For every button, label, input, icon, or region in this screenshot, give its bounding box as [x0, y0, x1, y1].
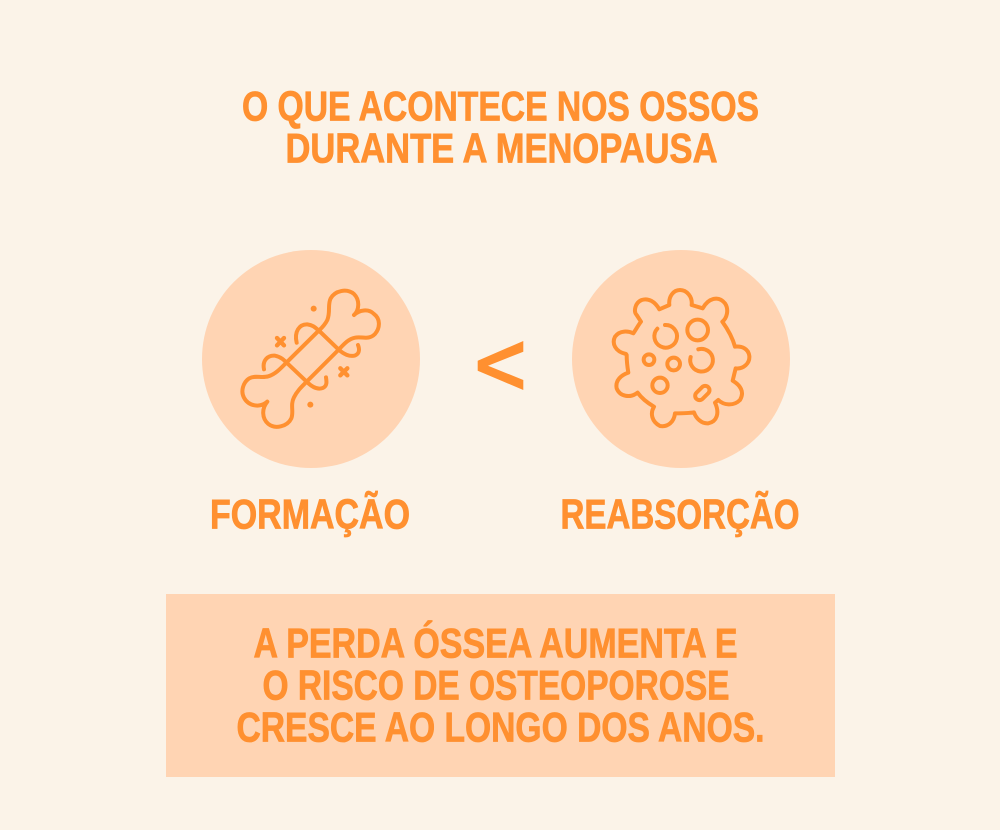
callout text: A PERDA ÓSSEA AUMENTA E [254, 618, 738, 666]
label: formação: FORMAÇÃO [210, 491, 410, 538]
callout [166, 594, 835, 777]
label: reabsorção: REABSORÇÃO [560, 491, 800, 538]
title: DURANTE A MENOPAUSA [286, 124, 718, 172]
panel: bone resorption circle [572, 250, 790, 468]
title [242, 82, 759, 172]
icon: bone [242, 291, 379, 427]
icon: porous bone cell [614, 290, 749, 426]
title: O QUE ACONTECE NOS OSSOS [242, 82, 759, 130]
callout text: O RISCO DE OSTEOPOROSE [262, 662, 730, 708]
less-than sign [478, 341, 523, 390]
callout text: CRESCE AO LONGO DOS ANOS. [236, 704, 764, 750]
callout text [236, 618, 764, 750]
panel: bone formation circle [202, 250, 420, 468]
